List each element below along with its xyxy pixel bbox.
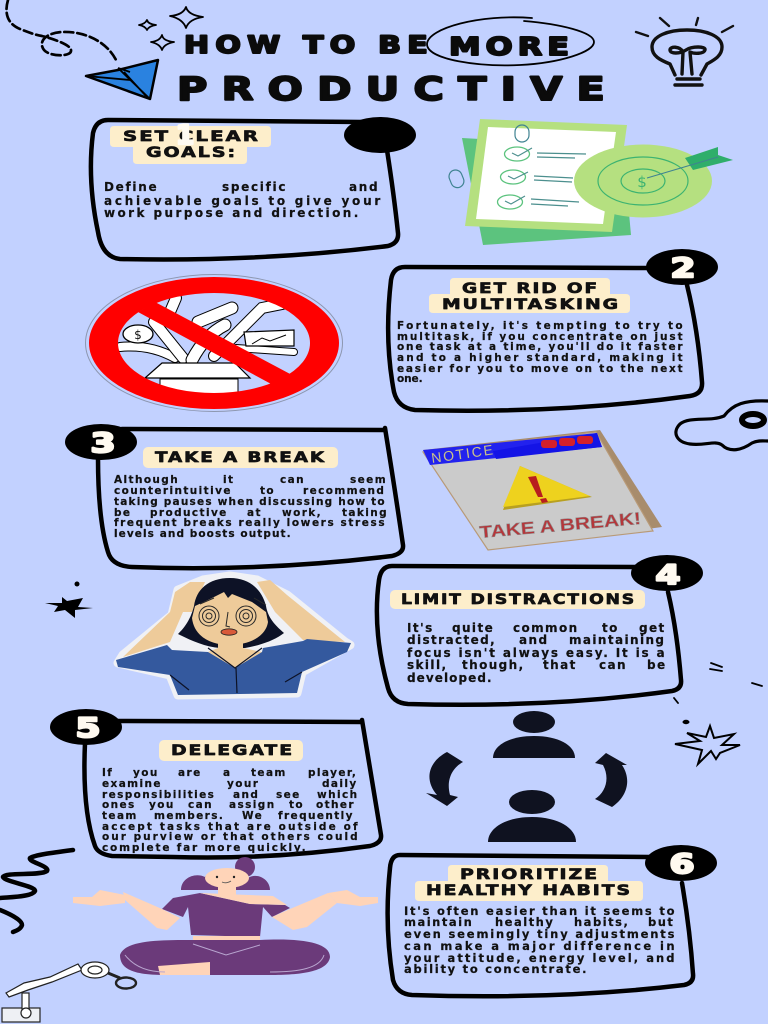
body text [104, 180, 382, 220]
body text: and [519, 633, 548, 647]
illustration: no multitasking sign [86, 274, 342, 412]
body text: you [149, 799, 175, 811]
body text: one task at a time, you'll do it faster [397, 341, 684, 353]
heading: TAKE A BREAK [155, 450, 326, 466]
body text: are [178, 767, 202, 779]
body text: you [133, 767, 159, 779]
body text: members. [154, 810, 224, 822]
body text: be [647, 658, 667, 672]
body text: complete far more quickly. [102, 842, 307, 854]
icon: black ink star left [45, 582, 93, 618]
body text: work, [282, 507, 322, 519]
number badge 1 [344, 117, 416, 153]
body text: maintaining [569, 633, 665, 647]
body text [407, 621, 667, 685]
body text: developed. [407, 671, 493, 685]
icon: scribble bottom left [0, 850, 73, 932]
body text: achievable goals to give your [104, 194, 382, 208]
heading highlight [110, 126, 271, 164]
body text: which [317, 789, 358, 801]
icon: scribble with eye [676, 401, 768, 450]
icon: delegate people and arrows [426, 711, 627, 842]
heading highlight [415, 865, 643, 901]
number badge 5 [50, 709, 122, 745]
body text: healthy [495, 915, 554, 929]
illustration: notice window: TAKE A BREAK! [479, 509, 642, 542]
panel: take a break [65, 424, 403, 568]
body text: at [247, 507, 262, 519]
illustration: notice window: NOTICE [430, 441, 494, 466]
heading: DELEGATE [171, 743, 294, 759]
number badge 5: 5 [76, 713, 100, 744]
illustration: notice window [423, 430, 662, 550]
number badge 3 [65, 424, 137, 460]
heading: MULTITASKING [442, 297, 620, 313]
panel: get rid of multitasking [388, 249, 718, 411]
heading [426, 867, 632, 899]
body text: It's often easier than it seems to [404, 904, 676, 918]
number badge 3: 3 [90, 428, 116, 459]
body text: easier for you to move on to the next [397, 363, 684, 375]
body text [114, 474, 388, 540]
icon: sparkle stars [139, 7, 203, 50]
body text: though, [462, 658, 525, 672]
body text: to [602, 621, 619, 635]
body text [404, 904, 676, 976]
number badge 2: 2 [670, 253, 696, 284]
body text: can [280, 474, 305, 486]
body text: taking [342, 507, 388, 519]
body text: multitask, if you concentrate on just [397, 331, 684, 343]
icon: goals checklist and target [447, 119, 733, 245]
body text: recommend [303, 485, 385, 497]
body text: see [276, 789, 301, 801]
body text: to [289, 799, 304, 811]
body text: counterintuitive [114, 485, 232, 497]
panel: limit distractions [377, 555, 703, 705]
body text: frequent breaks really lowers stress [114, 517, 386, 529]
body text: can [599, 658, 627, 672]
heading [442, 281, 620, 313]
body text: habits, [574, 915, 629, 929]
body text: assign [229, 799, 276, 811]
heading highlight [143, 447, 338, 468]
body text: a [223, 767, 232, 779]
body text: even seemingly tiny adjustments [404, 927, 676, 941]
panel: prioritize healthy habits [388, 845, 717, 996]
body text: daily [322, 778, 358, 790]
body text: accept tasks that are outside of [102, 821, 359, 833]
body text: frequently [278, 810, 354, 822]
body text: one. [397, 373, 424, 385]
icon: paper plane [86, 60, 158, 99]
heading: PRIORITIZE [460, 867, 599, 883]
title: MORE [449, 32, 574, 61]
body text: to [260, 485, 275, 497]
body text: other [316, 799, 355, 811]
illustration: meditating woman [73, 857, 378, 975]
body text: taking pauses when discussing how to [114, 496, 386, 508]
body text: levels and boosts output. [114, 528, 292, 540]
body text: that [543, 658, 577, 672]
heading highlight [429, 278, 630, 313]
number badge 6 [645, 845, 717, 881]
body text: responsibilities [102, 789, 215, 801]
number badge 4: 4 [656, 560, 680, 591]
body text: quite [452, 621, 494, 635]
body text: our purview or that others could [102, 831, 359, 843]
heading: SET CLEAR [123, 129, 260, 145]
body text: player, [308, 767, 357, 779]
body text: and to a higher standard, making it [397, 352, 684, 364]
misplaced number 1: 1 [176, 120, 194, 151]
number badge 2 [646, 249, 718, 285]
body text: but [648, 915, 674, 929]
heading: GOALS: [146, 145, 237, 161]
body text: Although [114, 474, 179, 486]
body text: your attitude, energy level, and [404, 951, 676, 965]
icon: robot arm [2, 962, 136, 1022]
body text: ones [102, 799, 136, 811]
body text: focus isn't always easy. It is a [407, 646, 666, 660]
body text: team [102, 810, 138, 822]
body text: common [513, 621, 579, 635]
body text: team [251, 767, 287, 779]
icon: dashed flight path [6, 0, 117, 62]
body text: distracted, [407, 633, 496, 647]
heading highlight [390, 590, 645, 609]
body text: get [639, 621, 666, 635]
body text: your [227, 778, 259, 790]
body text: maintain [404, 915, 473, 929]
body text: productive [150, 507, 228, 519]
body text: skill, [407, 658, 447, 672]
body text: We [242, 810, 263, 822]
body text: work purpose and direction. [104, 206, 360, 220]
icon: light bulb [636, 18, 733, 85]
heading highlight [159, 740, 303, 761]
illustration: no multitasking sign: $ [134, 328, 142, 342]
icon: goals checklist and target: $ [637, 173, 647, 191]
body text: be [114, 507, 131, 519]
icon: hand drawn circle around MORE [427, 17, 594, 65]
body text [102, 767, 359, 854]
heading [123, 129, 260, 161]
body text: seem [350, 474, 387, 486]
title: HOW TO BE [184, 31, 434, 59]
panel: delegate [50, 709, 381, 858]
number badge 6: 6 [670, 849, 694, 880]
heading: LIMIT DISTRACTIONS [401, 592, 636, 608]
icon: specks and ink star right [674, 663, 762, 764]
body text: can [188, 799, 213, 811]
body text: and [349, 180, 379, 194]
body text: Define [104, 180, 158, 194]
body text: Fortunately, it's tempting to try to [397, 320, 684, 332]
body text: ability to concentrate. [404, 962, 588, 976]
heading: HEALTHY HABITS [426, 883, 632, 899]
body text: and [233, 789, 259, 801]
title [177, 31, 619, 108]
illustration: stressed woman [116, 576, 351, 695]
body text: examine [102, 778, 162, 790]
body text: specific [222, 180, 287, 194]
title: PRODUCTIVE [177, 70, 619, 108]
panel: set clear goals [91, 117, 416, 259]
body text: If [102, 767, 113, 779]
body text: It's [407, 621, 434, 635]
body text: it [223, 474, 234, 486]
body text [397, 320, 684, 385]
number badge 4 [631, 555, 703, 591]
heading: GET RID OF [462, 281, 599, 297]
body text: can make a major difference in [404, 939, 676, 953]
